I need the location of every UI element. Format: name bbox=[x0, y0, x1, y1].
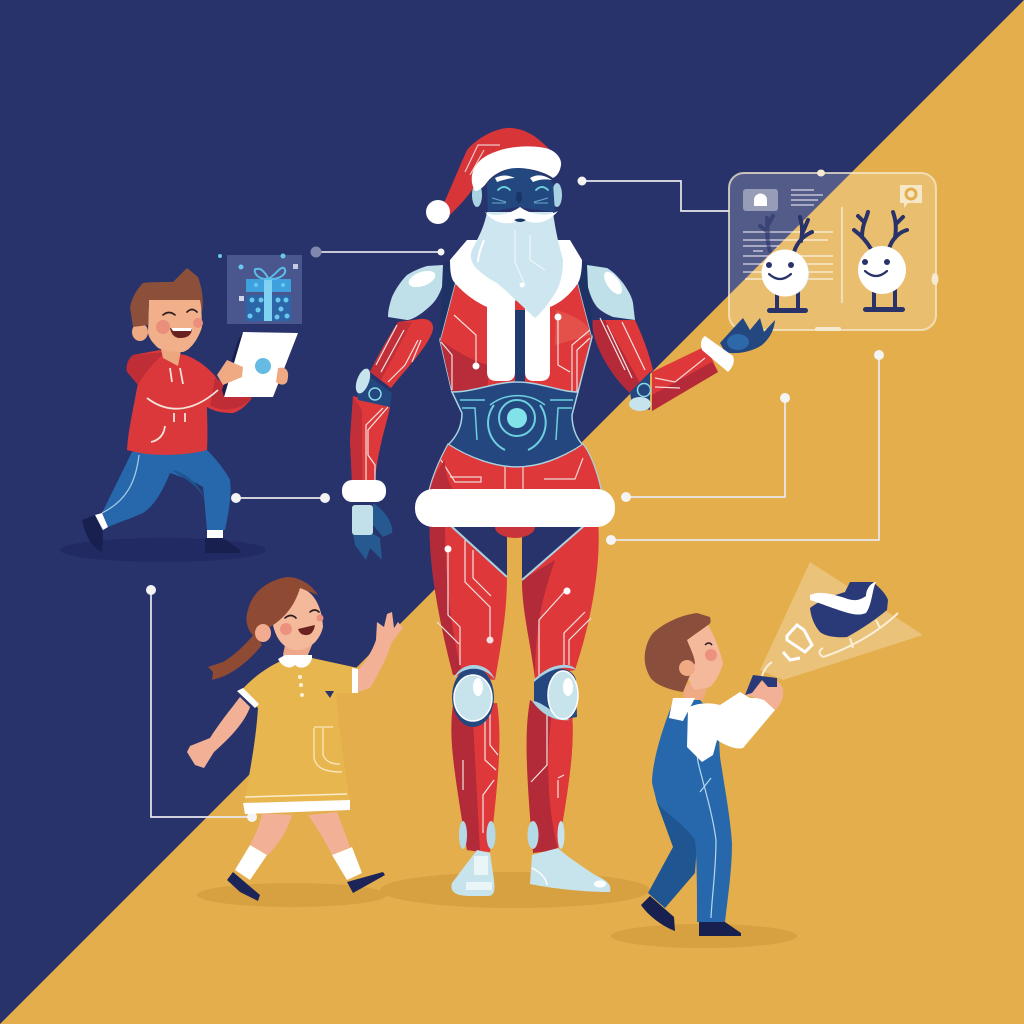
boy pants bbox=[102, 450, 231, 530]
reindeer left bbox=[760, 216, 812, 313]
gift hologram bbox=[218, 254, 302, 324]
boy with controller bbox=[641, 562, 923, 936]
belt bbox=[415, 489, 615, 527]
shirt bbox=[669, 698, 695, 721]
braid bbox=[208, 633, 262, 680]
hologram sleigh bbox=[783, 582, 898, 660]
projection beam bbox=[760, 562, 923, 680]
left arm bbox=[342, 319, 433, 560]
tablet bbox=[224, 332, 298, 397]
girl bbox=[187, 577, 403, 901]
head neck bbox=[684, 680, 710, 700]
right leg bbox=[522, 520, 610, 892]
reindeer right bbox=[854, 212, 907, 312]
beard bbox=[471, 212, 563, 318]
hologram panel: reindeer bbox=[729, 170, 938, 331]
right arm bbox=[593, 318, 775, 411]
hoodie bbox=[127, 350, 252, 455]
robot santa bbox=[342, 128, 775, 896]
left leg bbox=[430, 520, 507, 896]
connector lines bbox=[146, 176, 884, 822]
dress bbox=[240, 658, 358, 805]
ground shadows bbox=[60, 538, 797, 948]
legs bbox=[648, 800, 700, 908]
shoulders bbox=[388, 265, 443, 320]
legs bbox=[250, 812, 350, 855]
torso bbox=[440, 283, 592, 392]
arms bbox=[187, 697, 250, 768]
head bbox=[283, 645, 312, 664]
head ears bbox=[472, 183, 482, 207]
waist bbox=[448, 382, 583, 467]
crotch panel bbox=[450, 525, 585, 580]
boy with tablet bbox=[82, 268, 298, 553]
boy head bbox=[160, 345, 182, 366]
head bbox=[685, 625, 723, 690]
mask face bbox=[487, 168, 555, 212]
hat bbox=[467, 128, 550, 175]
hips bbox=[428, 444, 602, 495]
hands and controller bbox=[745, 680, 783, 710]
navy joints behind shoulders and fur collar bbox=[440, 262, 592, 340]
